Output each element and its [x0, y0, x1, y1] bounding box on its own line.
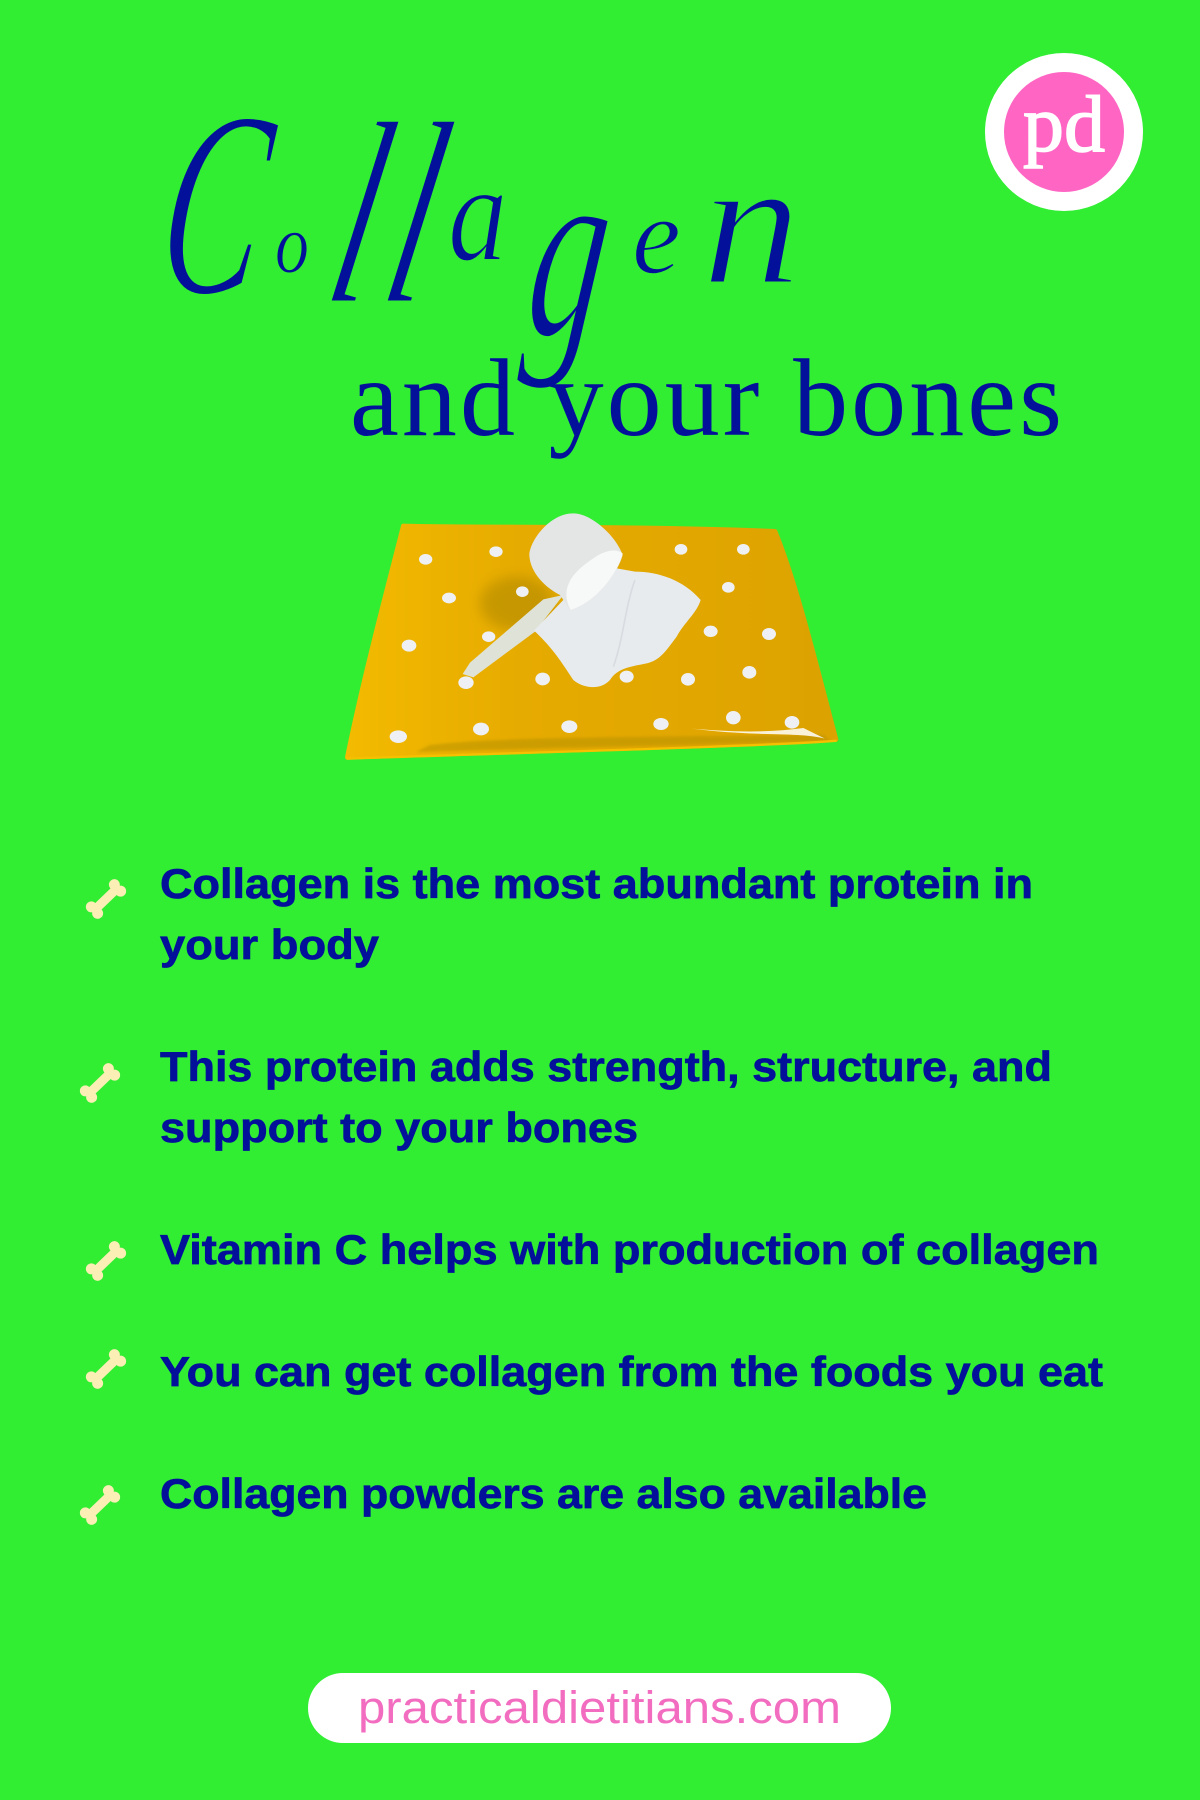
- bullet 4: You can get collagen from the foods you eat: [160, 1348, 1103, 1395]
- photo: yellow plate with collagen scoop: [347, 513, 837, 759]
- logo: pd badge: pd: [1023, 81, 1105, 169]
- title: Collagen: l: [310, 69, 414, 359]
- subtitle: and your bones: and your bones: [350, 337, 1062, 459]
- bullet list: [78, 860, 1103, 1527]
- bullet 2: [78, 1043, 1052, 1151]
- footer pill: website: practicaldietitians.com: [358, 1682, 841, 1733]
- powder fold: [613, 580, 635, 667]
- icon: bone: [84, 877, 128, 921]
- plate: [347, 526, 836, 757]
- plate shadow: [480, 577, 553, 630]
- title: Collagen: C: [145, 58, 289, 352]
- icon: bone: [78, 1483, 122, 1527]
- title: Collagen: e: [632, 175, 681, 297]
- bullet 5: [78, 1470, 927, 1527]
- bullet 3: Vitamin C helps with production of collagen: [160, 1226, 1099, 1273]
- title: Collagen: l: [366, 69, 470, 359]
- bullet 1: [84, 860, 1033, 968]
- bullet 1: Collagen is the most abundant protein in: [160, 860, 1033, 907]
- bullet 2: support to your bones: [160, 1104, 638, 1151]
- icon: bone: [84, 1347, 128, 1391]
- icon: bone: [78, 1061, 122, 1105]
- scoop handle: [463, 595, 563, 677]
- bullet 2: This protein adds strength, structure, and: [160, 1043, 1052, 1090]
- title: Collagen: g: [515, 108, 627, 390]
- plate rim highlight: [347, 741, 837, 759]
- plate rim shading: [417, 735, 830, 752]
- footer pill: website: [308, 1673, 891, 1743]
- bullet 5: Collagen powders are also available: [160, 1470, 927, 1517]
- scoop opening: [566, 551, 623, 610]
- powder: [534, 568, 701, 687]
- plate highlight: [692, 728, 825, 739]
- icon: bone: [84, 1239, 128, 1283]
- title: Collagen: o: [275, 196, 309, 291]
- logo: pd badge: [985, 53, 1143, 211]
- title: Collagen: [145, 58, 801, 390]
- scoop cup: [529, 513, 623, 611]
- title: Collagen: n: [702, 122, 801, 322]
- title: Collagen: a: [448, 136, 507, 291]
- bullet 1: your body: [160, 921, 380, 968]
- polka dots: [390, 544, 799, 743]
